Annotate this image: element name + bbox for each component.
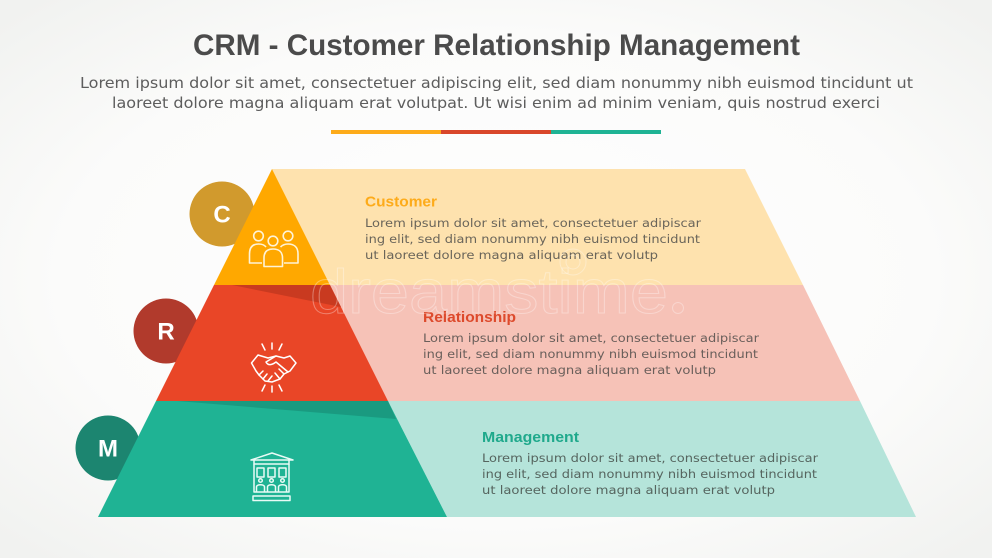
text block: relationship: Relationship xyxy=(423,309,516,326)
letter circle M: M xyxy=(98,436,118,462)
pyramid tier: management xyxy=(98,401,447,517)
panel: customer band xyxy=(272,169,803,285)
text block: management: Lorem ipsum dolor sit amet, consectetuer adipiscar xyxy=(482,451,818,465)
divider: three colour bar xyxy=(331,130,661,134)
text block: relationship: Lorem ipsum dolor sit amet, consectetuer adipiscar xyxy=(423,331,759,345)
text block: management: Management xyxy=(482,429,579,446)
letter circle R xyxy=(134,298,198,364)
text block: management: ing elit, sed diam nonummy nibh euismod tincidunt xyxy=(482,467,817,481)
letter circle R: R xyxy=(157,318,175,346)
text block: management: ut laoreet dolore magna aliquam erat volutp xyxy=(482,483,775,497)
subtitle: laoreet dolore magna aliquam erat volutpat. Ut wisi enim ad minim veniam, quis nostrud exerci xyxy=(112,94,880,112)
text block: relationship: ut laoreet dolore magna aliquam erat volutp xyxy=(423,363,716,377)
icon: management building xyxy=(251,453,293,500)
title: CRM - Customer Relationship Management xyxy=(193,29,800,62)
text block: customer: ut laoreet dolore magna aliquam erat volutp xyxy=(365,248,658,262)
subtitle: Lorem ipsum dolor sit amet, consectetuer adipiscing elit, sed diam nonummy nibh euismod tincidunt ut xyxy=(80,74,913,92)
icon: handshake xyxy=(252,343,296,392)
text block: customer: ing elit, sed diam nonummy nibh euismod tincidunt xyxy=(365,232,700,246)
panel: management band xyxy=(388,401,916,517)
text block: customer: Customer xyxy=(365,194,437,210)
subtitle xyxy=(80,74,913,112)
pyramid tier: customer xyxy=(214,169,330,285)
icon: customer group xyxy=(250,231,298,266)
pyramid tier: relationship xyxy=(156,285,388,401)
text block: management xyxy=(482,429,818,497)
text block: relationship xyxy=(423,309,759,377)
text block: customer xyxy=(365,194,701,262)
text block: customer: Lorem ipsum dolor sit amet, consectetuer adipiscar xyxy=(365,216,701,230)
text block: relationship: ing elit, sed diam nonummy nibh euismod tincidunt xyxy=(423,347,758,361)
letter circle C xyxy=(190,182,254,246)
panel: relationship band xyxy=(330,285,860,401)
letter circle M xyxy=(76,416,140,480)
letter circle C: C xyxy=(213,202,231,228)
watermark: dreamstime xyxy=(310,258,668,327)
